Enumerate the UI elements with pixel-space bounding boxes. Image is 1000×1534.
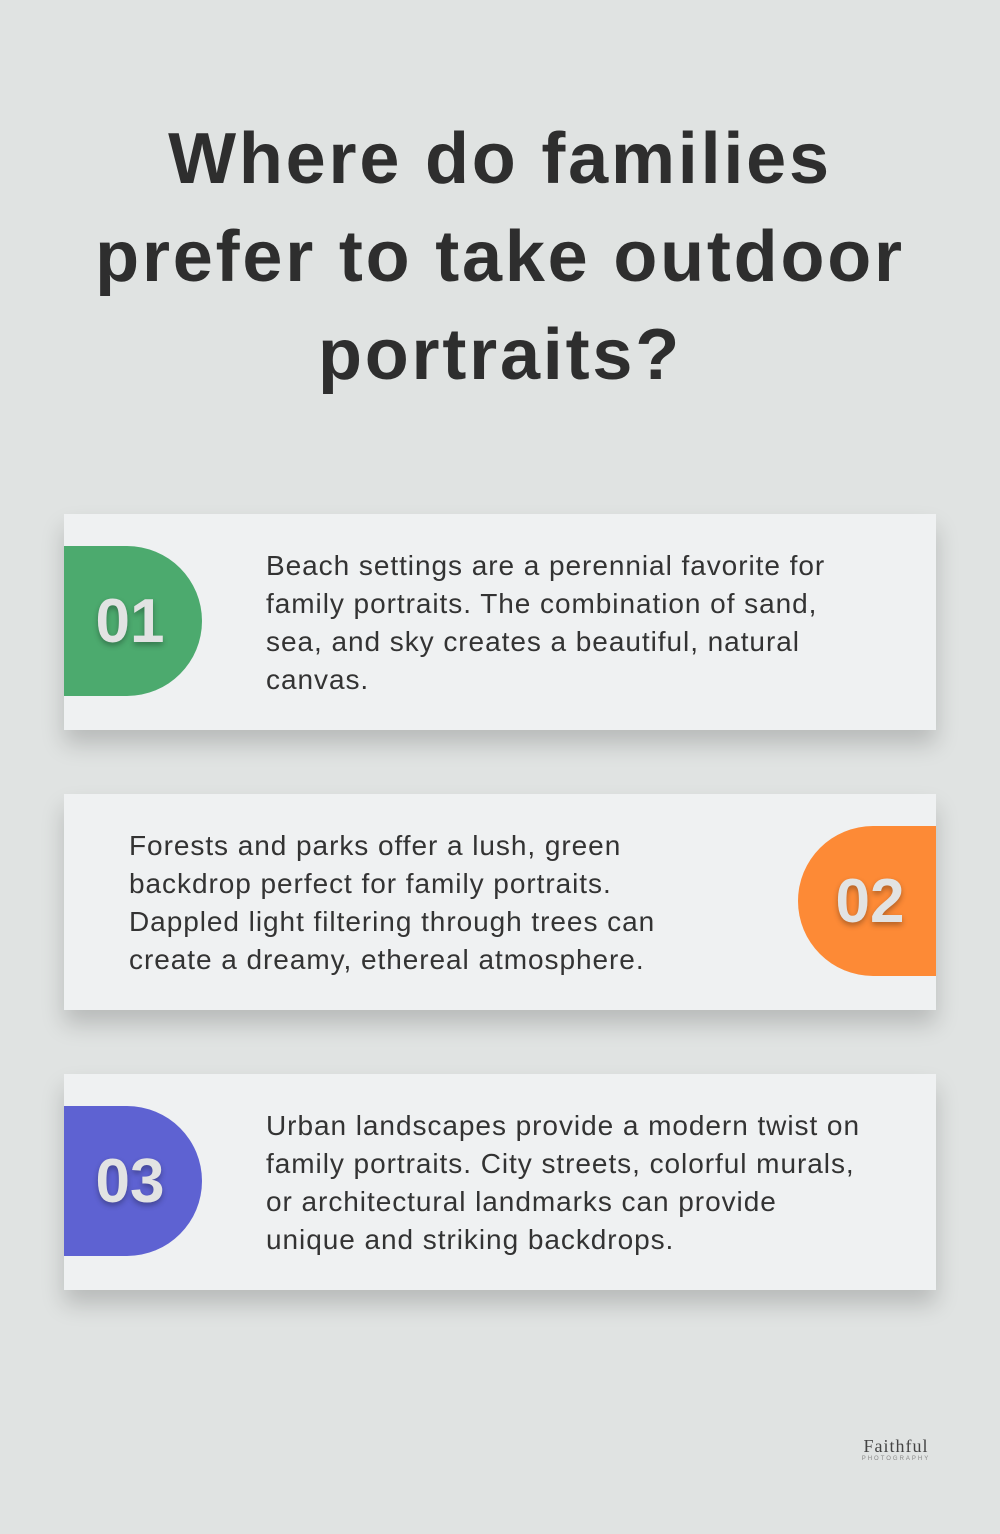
text: beach: family portraits. The combination of sand, — [266, 588, 817, 619]
badge 02: 02 — [836, 866, 904, 936]
title — [95, 119, 905, 395]
text: urban: family portraits. City streets, colorful murals, — [266, 1148, 855, 1179]
text: beach — [266, 550, 825, 695]
text: forests: create a dreamy, ethereal atmosphere. — [129, 944, 645, 975]
panel: urban — [64, 1074, 936, 1290]
panel: beach — [64, 514, 936, 730]
panel: forests — [64, 794, 936, 1010]
title: Where do families — [168, 119, 832, 199]
text: beach: sea, and sky creates a beautiful, natural — [266, 626, 800, 657]
title: prefer to take outdoor — [95, 217, 905, 297]
badge 03: 03 — [96, 1146, 164, 1216]
text: urban — [266, 1110, 860, 1255]
text: forests: Dappled light filtering through trees can — [129, 906, 655, 937]
text: forests: Forests and parks offer a lush, green — [129, 830, 621, 861]
text: beach: Beach settings are a perennial favorite for — [266, 550, 825, 581]
text: urban: unique and striking backdrops. — [266, 1224, 674, 1255]
text: urban: Urban landscapes provide a modern twist on — [266, 1110, 860, 1141]
badge 01: 01 — [96, 586, 164, 656]
logo: PHOTOGRAPHY — [862, 1456, 930, 1462]
text: forests: backdrop perfect for family portraits. — [129, 868, 612, 899]
text: forests — [129, 830, 655, 975]
text: urban: or architectural landmarks can provide — [266, 1186, 777, 1217]
logo: Faithful — [864, 1436, 928, 1456]
badge 03 — [64, 1106, 202, 1256]
badge 01 — [64, 546, 202, 696]
badge 02 — [798, 826, 936, 976]
title: portraits? — [318, 315, 682, 395]
text: beach: canvas. — [266, 664, 369, 695]
